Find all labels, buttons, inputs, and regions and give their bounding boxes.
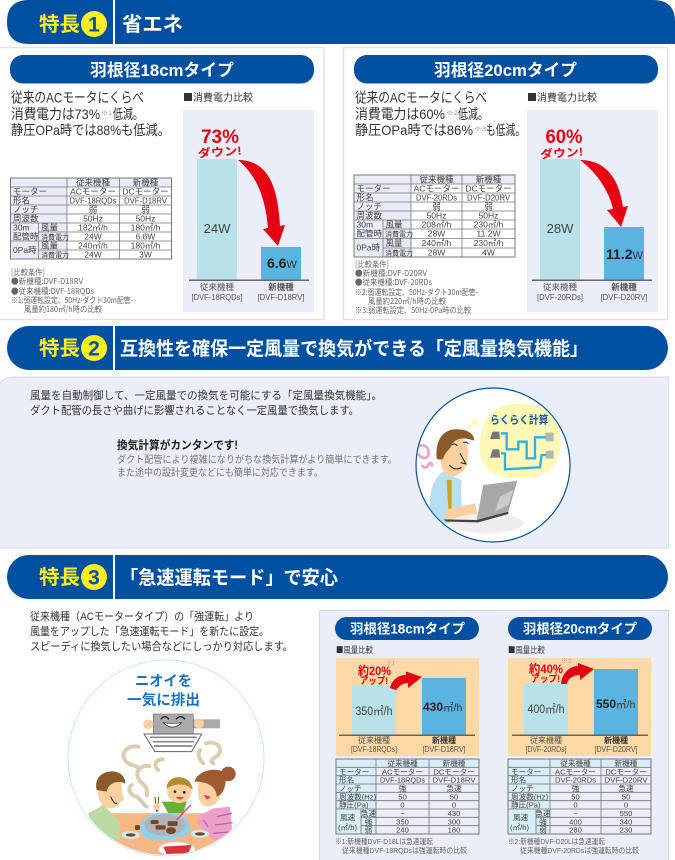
table: 18cm specifications: 24W <box>84 250 102 260</box>
table: 18cm airflow specifications: 静圧(Pa) <box>339 800 369 810</box>
table: 18cm specifications: 消費電力 <box>41 232 69 242</box>
callout: about 20 percent up: ※1 <box>386 660 395 667</box>
table: 20cm specifications: 4W <box>482 248 495 258</box>
table: 18cm specifications: DVF-D18RV <box>124 196 167 206</box>
table: 18cm airflow specifications: 弱 <box>365 826 372 835</box>
chart: 20cm power comparison: 28W <box>547 221 574 236</box>
table: 18cm specifications: 3W <box>139 250 152 260</box>
table: 20cm specifications: 弱 <box>484 202 493 212</box>
table: 18cm specifications: 182㎡/h <box>78 222 108 232</box>
notes: 18cm conditions: 風量約180㎡/h時の比較 <box>24 304 102 315</box>
chart: 18cm power comparison <box>183 89 314 312</box>
text: 18cm description: 消費電力は73% <box>11 106 100 122</box>
table: 18cm specifications: 50Hz <box>83 214 103 224</box>
table: 20cm specifications: 30m <box>356 220 373 230</box>
table: 18cm airflow specifications: DVF-18RQDs <box>380 776 425 785</box>
notes: 20cm conditions: ※3:弱運転設定、50Hz-0Pa時の比較 <box>355 305 471 316</box>
chart: 18cm power comparison: 新機種 <box>268 282 294 292</box>
text: rapid mode description: 風量をアップした「急速運転モード」を新たに設定。 <box>30 624 269 638</box>
callout: exhaust odor <box>127 673 200 709</box>
table: 20cm specifications: ノッチ <box>356 202 382 212</box>
notes: 18cm airflow: ※1:新機種DVF-D18Lは急速運転 <box>335 836 433 846</box>
table: 18cm airflow specifications: 風速 <box>340 813 356 822</box>
notes: 18cm conditions: [比較条件] <box>11 267 45 278</box>
header: feature 2: 2 <box>88 338 100 360</box>
header: feature 2 <box>7 326 668 370</box>
table: 18cm airflow specifications: 180 <box>448 826 460 835</box>
chart: 20cm airflow: [DVF-D20RV] <box>594 745 638 754</box>
notes: 20cm conditions: ●新機種:DVF-D20RV <box>355 268 427 279</box>
header: feature 3: 3 <box>88 566 100 590</box>
chart: 18cm airflow: 350㎡/h <box>356 705 392 718</box>
chart: 20cm power comparison: [DVF-20RDs] <box>537 292 583 302</box>
table: 18cm specifications: 周波数 <box>13 214 39 224</box>
table: 18cm specifications: DCモーター <box>122 186 169 196</box>
chart: 20cm power comparison: 11.2W <box>606 246 643 262</box>
laptop <box>443 481 523 533</box>
chart: 18cm power comparison: [DVF-D18RV] <box>258 292 304 302</box>
chart: 18cm airflow <box>336 644 479 756</box>
text: rapid mode description: スピーディに換気したい場合などにしっかり対応します。 <box>30 639 293 653</box>
chart: 20cm power comparison: [DVF-D20RV] <box>600 292 648 302</box>
callout: about 40 percent up <box>529 658 572 685</box>
chart: 18cm airflow: 430㎡/h <box>423 700 462 714</box>
table: 18cm airflow specifications: 従来機種 <box>387 758 418 768</box>
chart: 18cm power comparison: 24W <box>204 221 231 236</box>
table: 20cm specifications: 50Hz <box>427 210 446 220</box>
callout: 60% down: 60% <box>546 127 583 148</box>
table: 18cm airflow specifications: 350 <box>396 817 409 826</box>
text: 20cm description <box>355 90 525 138</box>
table: 20cm airflow specifications: 急速 <box>535 808 551 818</box>
table: 20cm airflow specifications: 50 <box>622 792 630 801</box>
text: 18cm description: ※1 <box>101 110 112 117</box>
callout: 73% down: ダウン! <box>197 143 242 161</box>
table: 20cm specifications: ACモーター <box>414 184 459 194</box>
header: feature 1 <box>7 0 675 44</box>
table: 20cm airflow specifications: 400 <box>569 817 582 826</box>
table: 20cm airflow specifications: 0 <box>624 801 628 810</box>
table: 20cm specifications: 形名 <box>356 192 374 202</box>
panel: constant airflow function <box>0 377 668 548</box>
ventilator mascot <box>143 714 220 752</box>
text: rapid mode description: 従来機種（ACモータータイプ）の「強運転」より <box>30 609 254 623</box>
table: 20cm specifications: 周波数 <box>356 210 383 220</box>
table: 20cm airflow specifications: モーター <box>511 767 541 776</box>
table: 18cm specifications: 6.6W <box>136 232 155 242</box>
pill heading: 18cm airflow: 羽根径18cmタイプ <box>350 620 465 636</box>
table: 20cm airflow specifications: DCモーター <box>605 767 647 776</box>
chart: 20cm airflow: 400㎡/h <box>528 703 564 716</box>
table: 20cm specifications: 弱 <box>432 202 441 212</box>
text: 20cm description: 従来のACモータにくらべ <box>355 90 487 106</box>
table: 18cm airflow specifications: 強 <box>365 816 373 826</box>
table: 18cm specifications: 新機種 <box>133 178 159 188</box>
table: 20cm specifications: 50Hz <box>479 210 498 220</box>
thought bubble <box>467 404 561 478</box>
table: 20cm airflow specifications: 急速 <box>618 783 634 793</box>
table: 20cm airflow specifications: 0 <box>573 801 578 810</box>
text: 18cm description <box>11 90 170 138</box>
table: 20cm airflow specifications: 340 <box>620 817 632 826</box>
table: 18cm airflow specifications: − <box>400 809 405 818</box>
table: 18cm airflow specifications: 430 <box>448 809 460 818</box>
table: 18cm airflow specifications: 強 <box>399 783 407 793</box>
table: 20cm specifications: 28W <box>428 228 445 238</box>
table: 18cm specifications: 風量 <box>41 240 59 250</box>
table: 18cm specifications: DVF-18RQDs <box>70 196 116 206</box>
callout: 73% down: 73% <box>201 127 239 148</box>
table: 18cm airflow specifications: 0 <box>452 801 456 810</box>
pill heading: 18cm type: 羽根径18cmタイプ <box>90 61 234 80</box>
father <box>88 771 125 843</box>
table: 18cm specifications: 風量 <box>41 222 59 232</box>
header: feature 2: 特長 <box>39 337 80 360</box>
text: 20cm description: 低減。 <box>458 106 488 122</box>
table: 20cm airflow specifications: 形名 <box>511 775 526 785</box>
table: 20cm specifications: 230㎡/h <box>474 220 504 230</box>
chart: 18cm power comparison: 6.6W <box>267 255 297 271</box>
notes: 20cm conditions: ●従来機種:DVF-20RDs <box>355 277 432 288</box>
table: 18cm airflow specifications: 300 <box>448 817 460 826</box>
table: 20cm airflow specifications: 弱 <box>539 826 547 835</box>
table: 20cm airflow specifications: 風速 <box>513 813 529 822</box>
illustration: family at grill <box>68 660 264 860</box>
notes: 20cm airflow: 従来機種DVF-20RDsは強運転時の比較 <box>520 845 639 855</box>
table: 20cm specifications: 従来機種 <box>419 174 454 184</box>
panel: 18cm energy saving <box>0 48 324 320</box>
table: 18cm airflow specifications: 急速 <box>446 783 462 793</box>
text: 20cm description: 静圧OPa時では86% <box>355 122 473 138</box>
table: 18cm specifications <box>10 178 172 260</box>
table: 20cm airflow specifications: DVF-D20RV <box>604 776 648 785</box>
chart: 20cm airflow: [DVF-20RDs] <box>526 745 566 754</box>
table: 20cm specifications: DVF-D20RV <box>467 192 510 202</box>
panel: 20cm energy saving <box>344 48 668 320</box>
header: feature 1: 1 <box>88 14 100 36</box>
chart: 18cm airflow: ■風量比較 <box>336 644 373 656</box>
table: 20cm specifications <box>354 174 515 258</box>
chart: 20cm airflow: ■風量比較 <box>508 644 545 656</box>
chart: 20cm power comparison: 従来機種 <box>543 282 577 292</box>
table: 18cm airflow specifications: DCモーター <box>433 767 475 776</box>
table: 18cm airflow specifications: 形名 <box>339 775 354 785</box>
notes: 18cm conditions: ●従来機種:DVF-18RQDs <box>11 286 94 297</box>
notes: 18cm conditions: ●新機種:DVF-D18RV <box>11 276 83 287</box>
callout: about 40 percent up: アップ! <box>531 674 560 685</box>
chart: 18cm airflow: 従来機種 <box>358 735 390 745</box>
table: 18cm airflow specifications: ACモーター <box>382 767 423 776</box>
child <box>153 777 193 813</box>
music notes <box>418 445 432 467</box>
table: 18cm airflow specifications: 新機種 <box>443 758 466 768</box>
callout: 60% down: ダウン! <box>540 145 584 161</box>
table: 18cm airflow specifications: 0 <box>400 801 405 810</box>
callout: about 20 percent up: 約20% <box>358 663 391 678</box>
callout: 60% down <box>540 127 584 161</box>
table: 20cm airflow specifications: 新機種 <box>615 758 638 768</box>
table: 20cm specifications: 240㎡/h <box>422 238 452 248</box>
table: 20cm airflow specifications: 静圧(Pa) <box>511 800 541 810</box>
table: 18cm airflow specifications: 急速 <box>361 808 376 818</box>
table: 20cm airflow specifications: ACモーター <box>555 767 596 776</box>
notes: 20cm airflow: ※2:新機種DVF-D20Lは急速運転 <box>508 836 605 846</box>
table: 18cm airflow specifications <box>336 758 479 835</box>
callout: exhaust odor: 一気に排出 <box>127 691 200 709</box>
table: 18cm specifications: 24W <box>84 232 102 242</box>
notes: 18cm airflow: 従来機種DVF-18RQDsは強運転時の比較 <box>342 845 467 855</box>
text: easy calculation: ダクト配管により複雑になりがちな換気計算がより簡単にできます。 <box>117 453 397 466</box>
header: feature 3: 特長 <box>39 566 80 589</box>
table: 18cm specifications: 0Pa時 <box>13 245 37 255</box>
chart: 20cm airflow: 550㎡/h <box>596 697 635 711</box>
header: feature 2: 互換性を確保一定風量で換気ができる「定風量換気機能」 <box>120 337 588 360</box>
table: 18cm specifications: モーター <box>13 186 47 196</box>
arrow: 18cm increase <box>390 672 422 690</box>
table: 20cm airflow specifications: 強 <box>572 783 580 793</box>
table: 20cm specifications: 消費電力 <box>385 230 413 238</box>
person <box>429 429 478 523</box>
chart: 20cm airflow: 新機種 <box>604 735 628 745</box>
table: 20cm specifications: 消費電力 <box>385 248 413 258</box>
text: 20cm description: 消費電力は60% <box>355 106 445 122</box>
table: 20cm airflow specifications: ノッチ <box>511 784 534 793</box>
table: 18cm specifications: 50Hz <box>136 214 155 224</box>
chart: 18cm airflow: [DVF-18RQDs] <box>351 745 397 754</box>
table: 18cm airflow specifications: ノッチ <box>339 784 362 793</box>
chart: 20cm power comparison: ■消費電力比較 <box>527 89 597 104</box>
table: 20cm specifications: 230㎡/h <box>474 238 504 248</box>
panel: airflow comparison <box>320 610 668 860</box>
notes: 18cm conditions: ※1:弱運転設定、50Hz-ダクト30m配管- <box>11 295 133 306</box>
table: 18cm specifications: 弱 <box>141 204 150 214</box>
text: 18cm description: 従来のACモータにくらべ <box>11 90 144 106</box>
chart: 20cm power comparison <box>527 89 658 312</box>
table: 20cm airflow specifications: 280 <box>569 826 582 835</box>
table: 18cm airflow specifications: モーター <box>339 767 369 776</box>
table: 18cm airflow specifications: 240 <box>396 826 409 835</box>
pill heading: 20cm airflow <box>508 617 652 640</box>
pill heading: 20cm type: 羽根径20cmタイプ <box>434 61 577 80</box>
notes: 20cm conditions <box>355 259 478 316</box>
table: 18cm specifications: 消費電力 <box>41 250 69 260</box>
notes: 20cm airflow <box>508 836 639 855</box>
notes: 18cm airflow <box>335 836 467 855</box>
table: 18cm specifications: 30m <box>13 222 30 232</box>
table <box>107 813 230 855</box>
text: function description <box>30 388 382 417</box>
chart: 20cm power comparison: 新機種 <box>611 282 637 292</box>
pill heading: 18cm type <box>10 55 314 84</box>
table: 18cm specifications: 180㎡/h <box>131 240 161 250</box>
callout: exhaust odor: ニオイを <box>135 673 192 690</box>
table: 20cm specifications: モーター <box>356 184 391 194</box>
smoke <box>124 743 220 807</box>
text: 18cm description: 低減。 <box>113 106 143 122</box>
illustration: man at laptop <box>416 388 570 542</box>
arrow: 18cm reduction <box>238 160 285 246</box>
callout: about 20 percent up: アップ! <box>360 676 388 687</box>
header: feature 3: 「急速運転モード」で安心 <box>120 566 338 589</box>
text: function description: 風量を自動制御して、一定風量での換気を可能にする「定風量換気機能」。 <box>30 388 382 402</box>
table: 20cm specifications: 11.2W <box>477 228 500 238</box>
table: 18cm airflow specifications: (㎡/h) <box>338 823 357 832</box>
table: 20cm specifications: 風量 <box>386 238 403 248</box>
notes: 18cm conditions <box>11 267 133 315</box>
text: 20cm description: も低減。 <box>486 122 525 138</box>
table: 18cm specifications: ノッチ <box>13 204 38 214</box>
table: 18cm airflow specifications: 周波数(Hz) <box>339 791 377 801</box>
mother <box>195 767 236 843</box>
table: 20cm airflow specifications <box>508 758 651 835</box>
chart: 20cm airflow <box>508 644 651 756</box>
callout: about 20 percent up <box>358 660 395 687</box>
chart: 18cm airflow: [DVF-D18RV] <box>422 745 466 754</box>
table: 18cm specifications: 180㎡/h <box>131 222 161 232</box>
table: 18cm airflow specifications: DVF-D18RV <box>432 776 476 785</box>
callout: 73% down <box>197 127 242 161</box>
chart: 18cm power comparison: 従来機種 <box>200 282 234 292</box>
chart: 18cm airflow: 新機種 <box>432 735 456 745</box>
callout: about 40 percent up: 約40% <box>529 661 563 676</box>
table: 20cm airflow specifications: 強 <box>539 816 547 826</box>
chart: 20cm airflow: 従来機種 <box>530 735 562 745</box>
text: 20cm description: ※3 <box>474 126 486 133</box>
table: 20cm specifications: 配管時 <box>356 228 383 238</box>
grill <box>122 805 209 857</box>
text: rapid mode description <box>30 609 293 653</box>
table: 20cm specifications: 208㎡/h <box>422 220 452 230</box>
chart: 18cm power comparison: ■消費電力比較 <box>183 89 253 104</box>
table: 20cm specifications: DCモーター <box>465 184 512 194</box>
table: 18cm specifications: 弱 <box>89 204 97 214</box>
thought bubble: らくらく計算 <box>490 412 548 426</box>
pill heading: 20cm airflow: 羽根径20cmタイプ <box>523 620 637 636</box>
pill heading: 20cm type <box>354 55 658 84</box>
arrow: 20cm increase <box>561 663 594 684</box>
table: 18cm specifications: 240㎡/h <box>78 240 108 250</box>
table: 18cm airflow specifications: 50 <box>450 792 458 801</box>
table: 20cm specifications: 新機種 <box>476 174 502 184</box>
table: 18cm specifications: 配管時 <box>13 232 39 242</box>
header: feature 1: 省エネ <box>122 13 183 36</box>
table: 20cm specifications: 0Pa時 <box>356 242 381 252</box>
text: function description: ダクト配管の長さや曲げに影響されることなく一定風量で換気します。 <box>30 403 359 417</box>
table: 20cm airflow specifications: (㎡/h) <box>510 823 529 832</box>
table: 20cm airflow specifications: 230 <box>620 826 632 835</box>
table: 20cm airflow specifications: 従来機種 <box>560 758 591 768</box>
header: feature 3 <box>7 555 668 599</box>
text: 20cm description: ※2 <box>446 110 458 117</box>
text: 18cm description: 静圧OPa時では88%も低減。 <box>11 122 170 138</box>
table: 18cm specifications: 形名 <box>13 196 30 206</box>
text: easy calculation: 換気計算がカンタンです! <box>117 438 238 452</box>
table: 18cm specifications: ACモーター <box>70 186 116 196</box>
notes: 20cm conditions: [比較条件] <box>355 259 389 270</box>
notes: 20cm conditions: 風量約220㎡/h時の比較 <box>368 296 446 307</box>
table: 20cm specifications: 28W <box>428 248 445 258</box>
table: 20cm airflow specifications: DVF-20RDs <box>555 776 596 785</box>
arrow: 20cm reduction <box>580 160 628 227</box>
table: 20cm airflow specifications: 550 <box>620 809 632 818</box>
table: 20cm airflow specifications: 周波数(Hz) <box>511 791 549 801</box>
chart: 18cm power comparison: [DVF-18RQDs] <box>192 292 242 302</box>
table: 18cm airflow specifications: 50 <box>398 792 407 801</box>
table: 20cm specifications: 風量 <box>386 220 403 230</box>
table: 20cm airflow specifications: 50 <box>571 792 580 801</box>
table: 20cm airflow specifications: − <box>573 809 578 818</box>
notes: 20cm conditions: ※2:弱運転設定、50Hz-ダクト30m配管- <box>355 287 478 298</box>
text: easy calculation <box>117 438 397 479</box>
text: easy calculation: また途中の設計変更などにも簡単に対応できます。 <box>117 466 323 479</box>
header: feature 1: 特長 <box>39 13 80 36</box>
pill heading: 18cm airflow <box>335 617 479 640</box>
table: 20cm specifications: DVF-20RDs <box>416 192 457 202</box>
table: 18cm specifications: 従来機種 <box>76 178 110 188</box>
callout: about 40 percent up: ※2 <box>561 658 572 665</box>
